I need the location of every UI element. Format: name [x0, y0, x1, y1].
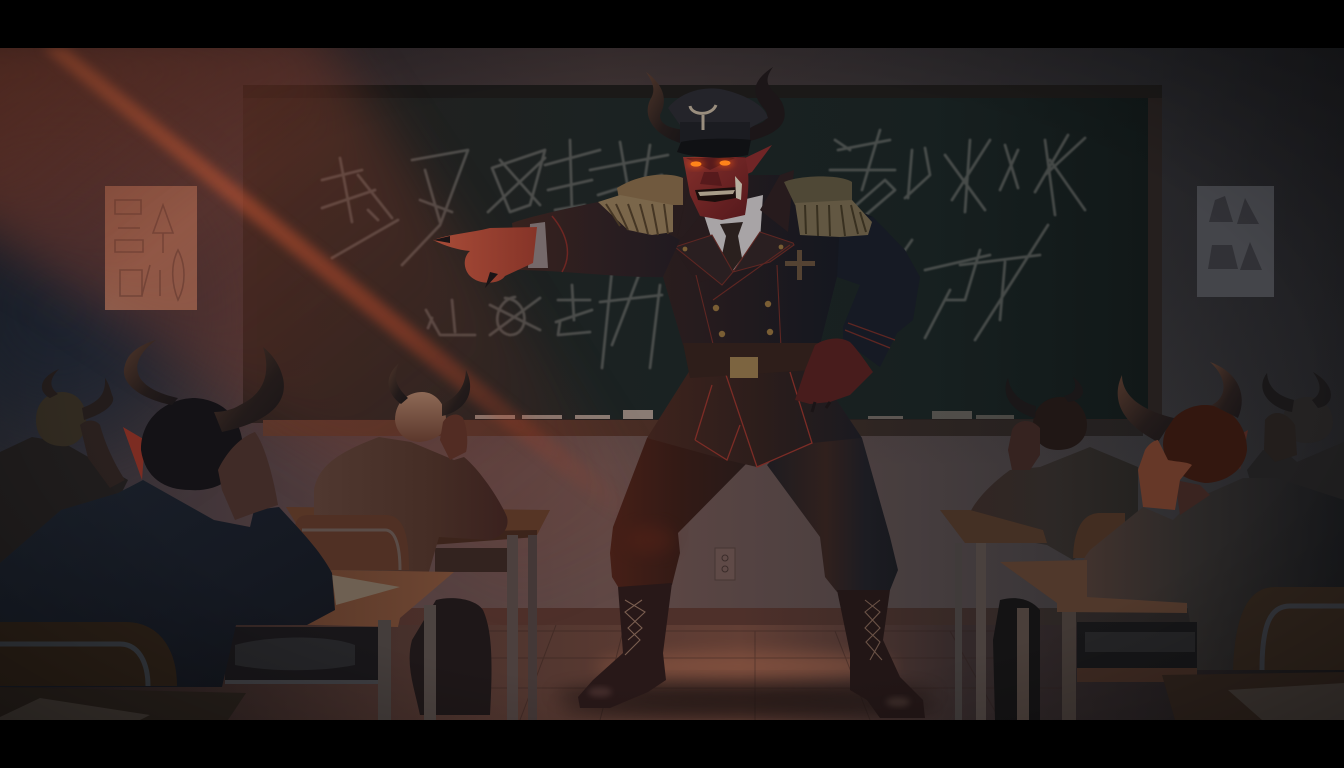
snarling mouth and tusks	[695, 187, 738, 202]
demon officer	[433, 67, 940, 718]
left boot	[578, 583, 672, 708]
right leg	[767, 430, 898, 592]
horns	[124, 340, 178, 405]
paper	[0, 698, 150, 720]
poster right	[1197, 186, 1274, 297]
centre-left student with desk	[286, 363, 550, 720]
right arm on hip	[837, 217, 920, 367]
jacket	[0, 480, 335, 687]
far-right student	[1247, 372, 1344, 520]
legs in dark trousers	[410, 598, 492, 715]
demon face	[683, 157, 748, 220]
jacket	[314, 437, 508, 575]
chair	[295, 515, 409, 570]
tiled floor	[0, 625, 1344, 720]
chalkboard surface	[257, 98, 1148, 419]
brow and nose shadow	[686, 157, 745, 186]
ear	[745, 145, 772, 175]
wall outlet	[715, 548, 735, 580]
foreground-right student	[1079, 362, 1344, 670]
right epaulette	[784, 176, 872, 237]
shadow ground	[560, 698, 940, 718]
ear	[1230, 430, 1248, 470]
poster left	[105, 186, 197, 310]
back-left student	[0, 369, 128, 600]
coat skirt	[647, 370, 862, 467]
belt and buckle	[683, 343, 820, 378]
horns	[389, 363, 408, 404]
officer cap	[668, 88, 768, 158]
hand on head	[440, 415, 467, 460]
horns of officer	[646, 67, 785, 143]
right-middle student with desk	[940, 377, 1138, 720]
hair	[1163, 405, 1247, 483]
glowing eyes	[687, 158, 734, 169]
desk and legs	[286, 507, 550, 720]
chalk tray	[263, 410, 1143, 436]
baseboard	[0, 608, 1344, 625]
foreground-left chair	[0, 622, 177, 686]
jacket	[968, 447, 1138, 560]
jacket collar and lapels	[675, 170, 794, 352]
hand	[1008, 421, 1040, 470]
shirt and tie	[700, 195, 763, 272]
hand on hip	[795, 338, 873, 412]
foreground-left student	[0, 340, 454, 720]
right boot	[837, 590, 925, 718]
jacket	[1079, 478, 1344, 670]
left leg	[610, 430, 747, 590]
horns	[1118, 375, 1174, 442]
pointing hand	[433, 227, 537, 288]
chalkboard frame	[243, 85, 1162, 423]
cap badge	[690, 105, 716, 130]
bottom letterbox bar	[0, 720, 1344, 768]
foreground-right front desk	[1162, 672, 1344, 720]
neck	[1175, 480, 1210, 515]
bald head	[395, 392, 446, 442]
foreground-right desk	[1000, 560, 1197, 720]
ear	[123, 427, 145, 480]
hand on head	[218, 432, 278, 520]
horns	[1006, 378, 1036, 418]
narrow light beam	[42, 48, 640, 518]
uniform buttons	[683, 245, 783, 357]
foreground-right chair	[1233, 587, 1344, 670]
chalk pieces	[475, 410, 1014, 419]
trousers	[993, 598, 1040, 720]
paper	[1228, 683, 1344, 720]
iron cross medal	[785, 250, 815, 280]
foreground-left front desk	[0, 687, 246, 720]
top letterbox bar	[0, 0, 1344, 48]
head	[1033, 397, 1087, 450]
hair	[141, 398, 243, 490]
desk	[940, 510, 1047, 720]
desk under arm	[225, 570, 454, 720]
chair	[1073, 513, 1125, 558]
hand on head	[1138, 440, 1192, 510]
chalk scribbles on board	[322, 130, 1085, 368]
red light wedge	[0, 20, 660, 590]
paper on desk	[332, 575, 400, 605]
pointing arm	[512, 200, 680, 277]
left epaulette	[598, 175, 683, 235]
jacket torso	[607, 175, 873, 345]
